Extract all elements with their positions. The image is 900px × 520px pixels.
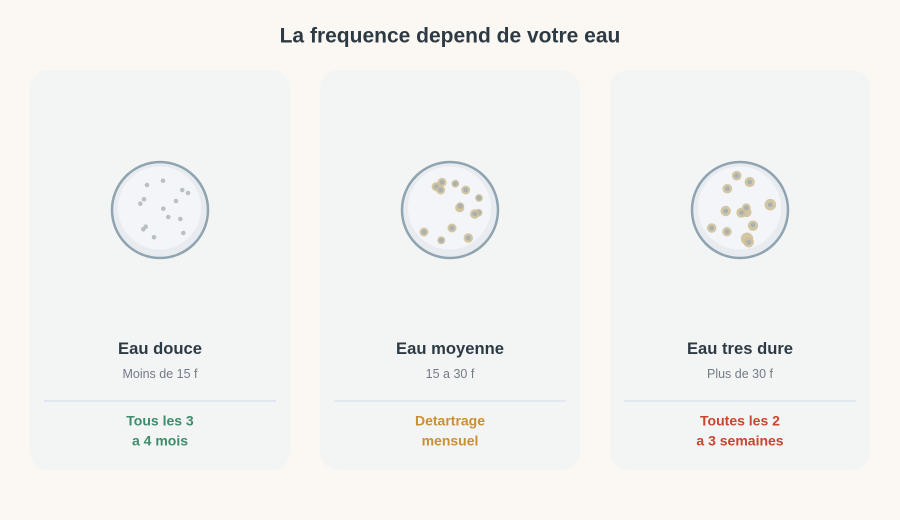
panel: eau douce [30,70,290,470]
hardness range: Plus de 30 f [707,367,774,381]
panel: eau tres dure [610,70,870,470]
panel: eau moyenne [320,70,580,470]
descaling frequency: Toutes les 2 [700,412,780,428]
descaling frequency: Detartrage [415,412,485,428]
icon: petri dish with moderate deposits [402,162,498,258]
heading: eau moyenne: Eau moyenne [396,339,504,358]
heading: eau tres dure: Eau tres dure [687,339,793,358]
icon: petri dish with heavy deposits [692,162,788,258]
icon: petri dish with few fine deposits [112,162,208,258]
hardness range: 15 a 30 f [426,367,475,381]
heading: eau douce: Eau douce [118,339,202,358]
descaling frequency: Tous les 3 [126,412,194,428]
card background [320,70,580,470]
card background [610,70,870,470]
title: La frequence depend de votre eau [280,24,620,48]
descaling frequency: mensuel [422,432,478,448]
hardness range: Moins de 15 f [122,367,198,381]
descaling frequency: a 3 semaines [696,432,784,448]
descaling frequency: a 4 mois [132,432,188,448]
card background [30,70,290,470]
